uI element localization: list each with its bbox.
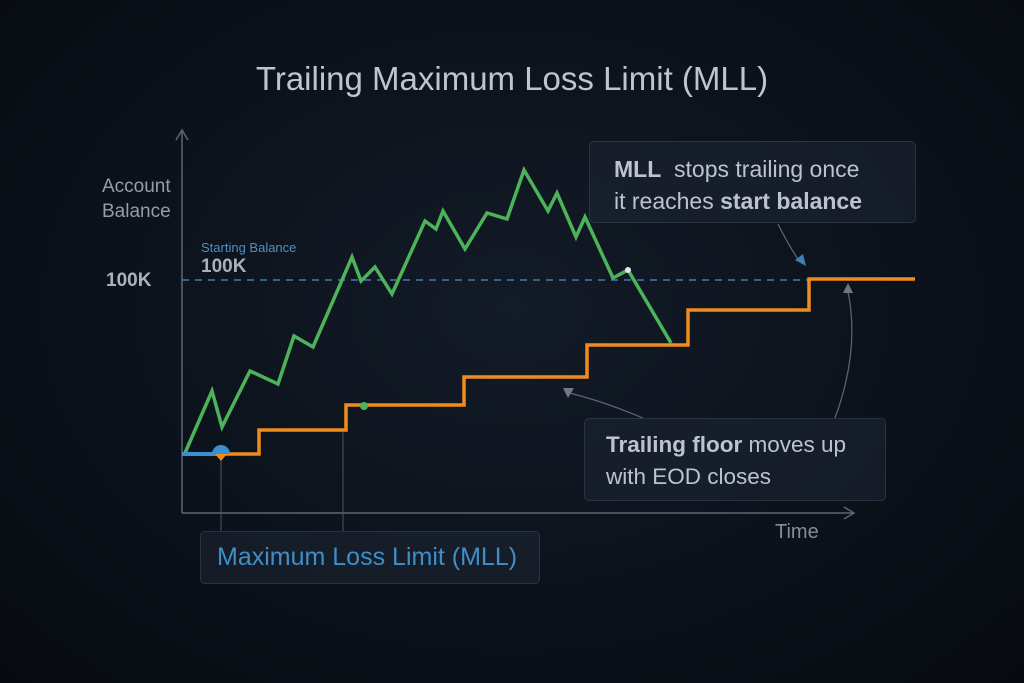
- callout: stops trailing: MLL stops trailing once: [614, 156, 859, 182]
- axes: [176, 130, 854, 519]
- callout: stops trailing: it reaches start balance: [614, 188, 862, 214]
- y-axis label: Account: [102, 176, 171, 197]
- guide lines to MLL label: [221, 430, 343, 531]
- MLL label box: Maximum Loss Limit (MLL): [217, 543, 517, 571]
- orange trailing floor: [185, 279, 915, 454]
- blue MLL start segment: [182, 452, 222, 456]
- callout: trailing floor: with EOD closes: [606, 464, 771, 489]
- x-axis label: Time: [775, 521, 819, 543]
- arrows: [565, 224, 852, 418]
- 100K axis label: 100K: [106, 270, 151, 291]
- dashed starting balance line: [182, 279, 810, 281]
- green balance line: [185, 170, 671, 453]
- starting balance label: [201, 240, 296, 277]
- callout: trailing floor: [584, 418, 886, 501]
- title: Trailing Maximum Loss Limit (MLL): [256, 60, 768, 97]
- callout: stops trailing: [589, 141, 916, 223]
- markers: [212, 267, 631, 461]
- y-axis label: [102, 176, 171, 222]
- callout: trailing floor: Trailing floor moves up: [606, 432, 846, 457]
- MLL label box: [200, 531, 540, 584]
- y-axis label: Balance: [102, 201, 171, 222]
- starting balance label: 100K: [201, 256, 246, 277]
- starting balance label: Starting Balance: [201, 240, 296, 255]
